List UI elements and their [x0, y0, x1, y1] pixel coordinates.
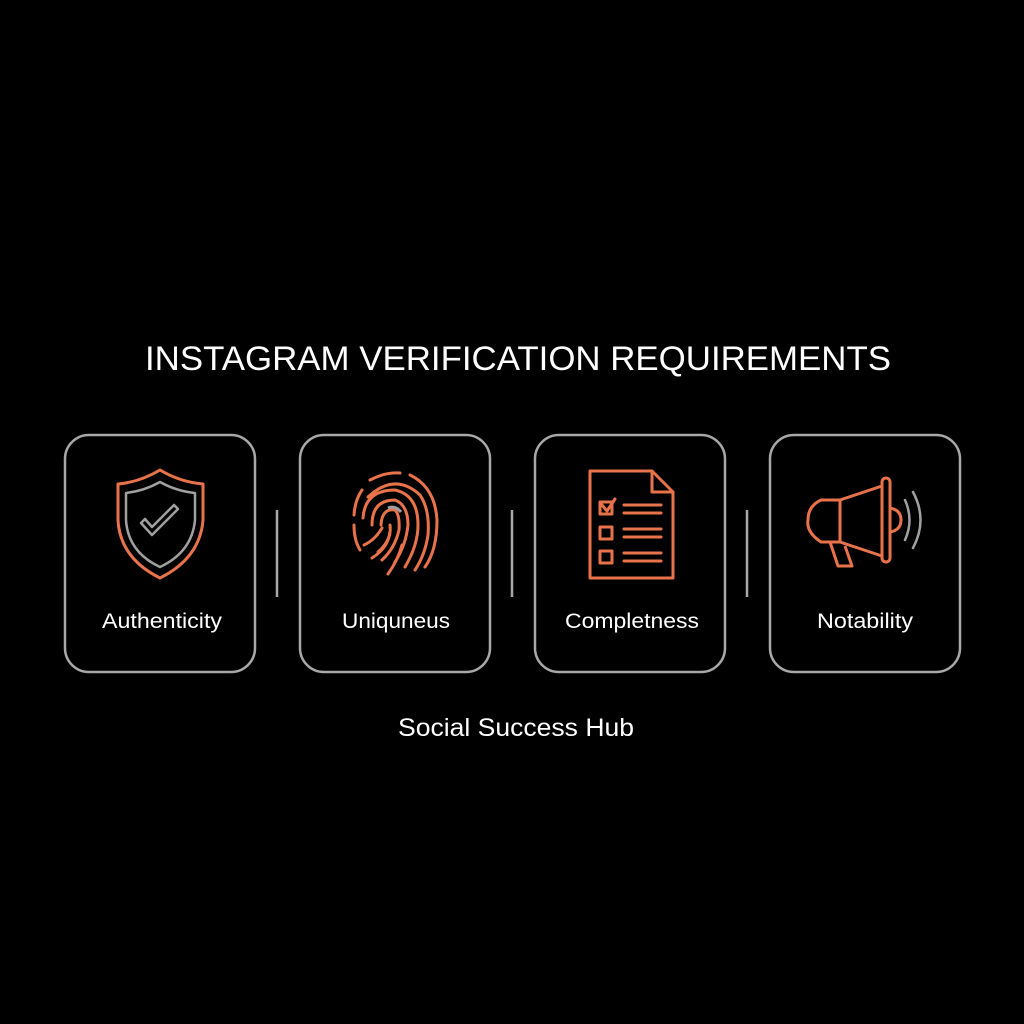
divider: [746, 510, 748, 597]
label: Completness: [565, 610, 699, 633]
panel: authenticity: [65, 435, 255, 672]
icon: megaphone: [808, 478, 901, 566]
icon: checklist: [590, 471, 673, 578]
title: INSTAGRAM VERIFICATION REQUIREMENTS: [145, 340, 891, 378]
divider: [276, 510, 278, 597]
panel: notability: [770, 435, 960, 672]
panel: completeness: [535, 435, 725, 672]
label: Authenticity: [102, 610, 223, 633]
icon: shield: [118, 470, 203, 578]
divider: [511, 510, 513, 597]
label: Notability: [817, 610, 914, 633]
label: Uniquneus: [342, 610, 450, 633]
footer: Social Success Hub: [398, 714, 634, 742]
panel: uniqueness: [300, 435, 490, 672]
icon: fingerprint: [354, 473, 437, 574]
